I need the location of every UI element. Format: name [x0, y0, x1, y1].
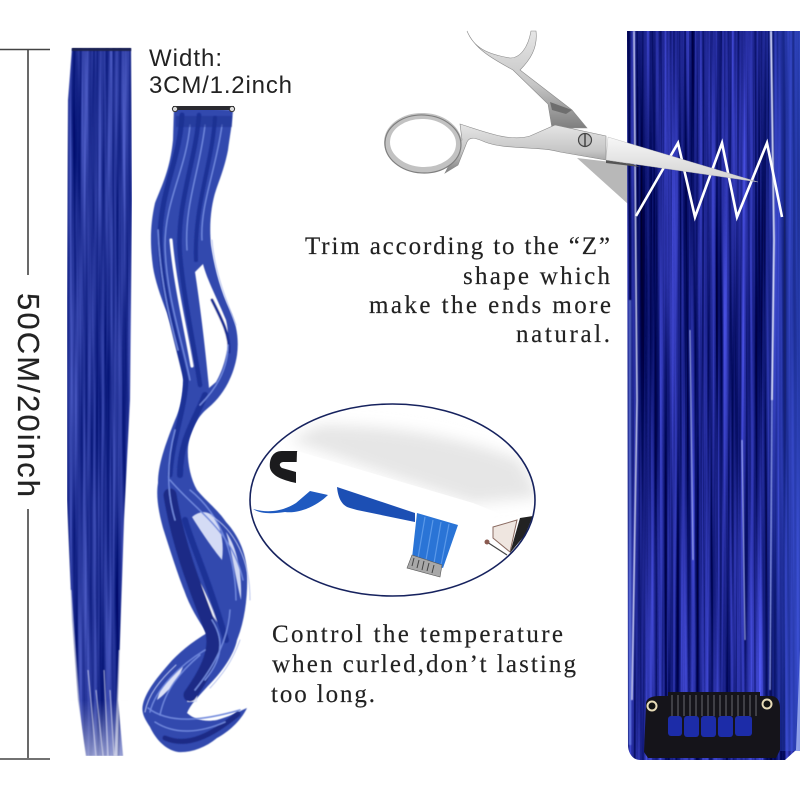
curled hair dark strands	[160, 115, 238, 741]
trim instruction text: make the ends more	[369, 292, 611, 319]
zigzag cut guide	[636, 143, 782, 217]
curling instruction text	[271, 621, 576, 708]
curled hair extension	[142, 106, 250, 752]
straight hair faded tips	[70, 590, 128, 758]
curling instruction text: Control the temperature	[272, 621, 563, 648]
finger ring	[386, 114, 460, 172]
curler white barrel	[296, 451, 498, 545]
clip teeth	[672, 695, 756, 716]
curling iron illustration	[250, 404, 540, 596]
curled hair clip	[172, 106, 235, 112]
pivot screw	[578, 134, 592, 146]
trim instruction text: shape which	[463, 263, 610, 290]
curled hair highlights	[148, 125, 243, 731]
small clip	[407, 555, 442, 577]
background shadow	[290, 425, 540, 503]
curled hair silhouette	[142, 107, 247, 752]
length label: 50CM/20inch	[11, 293, 46, 497]
hair strand highlights	[630, 31, 774, 745]
trim instruction text: Trim according to the “Z”	[305, 233, 610, 260]
width label: 3CM/1.2inch	[149, 72, 292, 99]
curled hair pale fuzz	[145, 240, 250, 712]
left ribbon of hair	[253, 491, 328, 513]
lower blade behind hair	[577, 158, 628, 204]
hair clip	[644, 692, 780, 758]
hair wrapped on barrel	[337, 487, 415, 522]
large hair close-up	[627, 31, 800, 760]
scissor blade	[606, 137, 758, 182]
lower handle and pivot plate	[445, 124, 606, 173]
scissors	[383, 31, 628, 204]
curling instruction text: too long.	[271, 681, 375, 708]
straight hair extension	[67, 48, 132, 758]
width label: Width:	[149, 45, 222, 72]
clip teeth windows	[668, 716, 752, 737]
trim instruction text: natural.	[516, 321, 610, 348]
iron hinge	[493, 520, 517, 552]
flat hair section	[412, 513, 458, 568]
width label	[149, 45, 292, 99]
upper handle	[467, 31, 587, 128]
curling instruction text: when curled,don’t lasting	[272, 651, 576, 678]
curled hair gaps	[171, 240, 192, 366]
ellipse outline	[250, 404, 535, 596]
curler black tip	[270, 451, 298, 483]
length dimension line	[0, 50, 50, 759]
trim instruction text	[305, 233, 611, 348]
